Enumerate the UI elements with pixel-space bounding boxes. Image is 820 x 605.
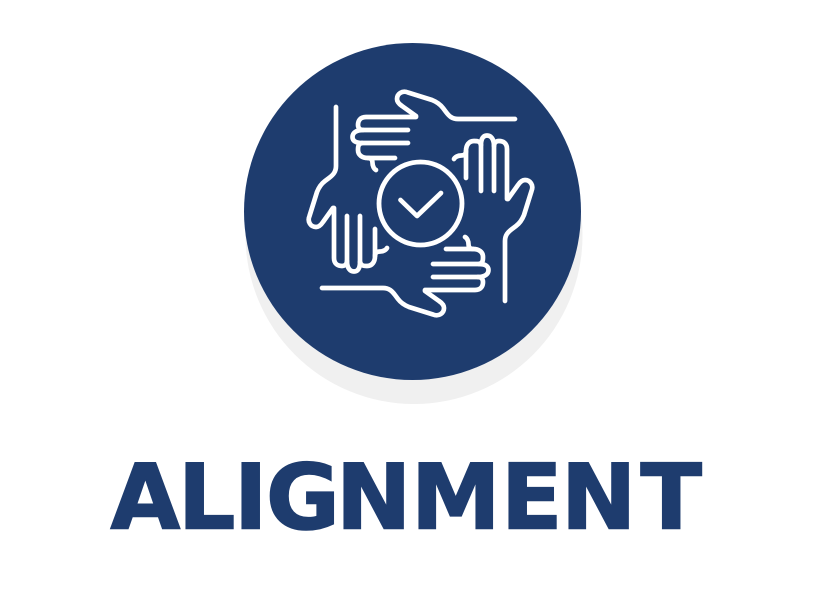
icon: four hands around check mark	[309, 92, 532, 315]
navy badge circle	[244, 43, 581, 380]
icon: check mark	[400, 193, 441, 216]
icon: center ring	[379, 162, 462, 245]
title: ALIGNMENT	[110, 445, 702, 550]
icon: top hand	[352, 92, 515, 170]
icon: left hand	[309, 107, 387, 272]
icon: right hand	[454, 136, 532, 301]
icon: bottom hand	[322, 237, 488, 315]
badge shadow	[246, 67, 582, 404]
